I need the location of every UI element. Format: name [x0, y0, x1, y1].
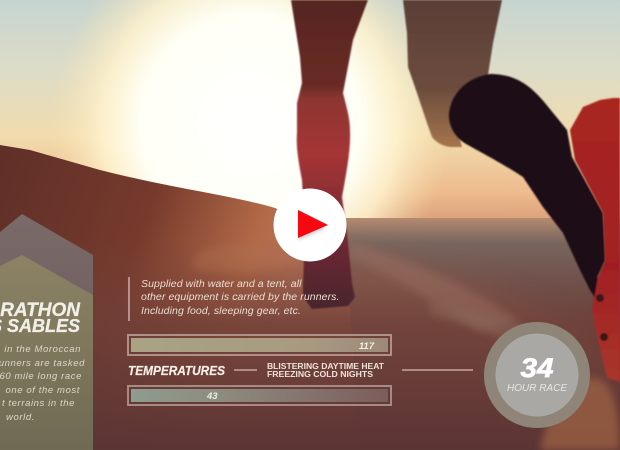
runner: front leg [291, 0, 368, 309]
badge: 34 hour race: 34 [520, 353, 554, 383]
bar: daytime high temperature 117: 117 [359, 341, 375, 352]
label: temperatures: TEMPERATURES [128, 364, 226, 378]
hexagon panel: race description [0, 214, 93, 450]
heading: marathon des sables: RATHON [0, 300, 81, 321]
callout: equipment note: Including food, sleeping gear, etc. [141, 305, 301, 317]
badge: 34 hour race [484, 322, 590, 428]
badge: 34 hour race: HOUR RACE [507, 383, 567, 394]
play button [274, 188, 346, 262]
text: race description: 60 mile long race [0, 371, 82, 382]
callout: equipment note: Supplied with water and a tent, all [141, 278, 302, 290]
text: race description: t terrains in the [2, 398, 75, 409]
text: race description: world. [6, 412, 35, 423]
runner: rear thigh [403, 0, 502, 147]
runner: dark calf sleeve [449, 74, 607, 305]
bar: night low temperature 43: 43 [206, 391, 218, 402]
text: race description: one of the most [6, 385, 80, 396]
callout: equipment note: other equipment is carried by the runners. [141, 291, 340, 303]
heading: marathon des sables [0, 300, 81, 336]
legend: heat and cold [267, 362, 384, 379]
text: race description: unners are tasked [0, 358, 85, 369]
bar: daytime high temperature 117 [128, 335, 391, 355]
text: race description: in the Moroccan [4, 344, 81, 355]
legend: heat and cold: FREEZING COLD NIGHTS [267, 370, 374, 379]
bar: night low temperature 43 [128, 386, 391, 405]
text: race description [0, 344, 85, 423]
runner: red shoe [570, 98, 620, 382]
connector line: temperatures to legend [234, 369, 257, 371]
connector line: legend to race badge [402, 369, 473, 371]
legend: heat and cold: BLISTERING DAYTIME HEAT [267, 362, 384, 371]
callout: equipment note [128, 277, 340, 321]
